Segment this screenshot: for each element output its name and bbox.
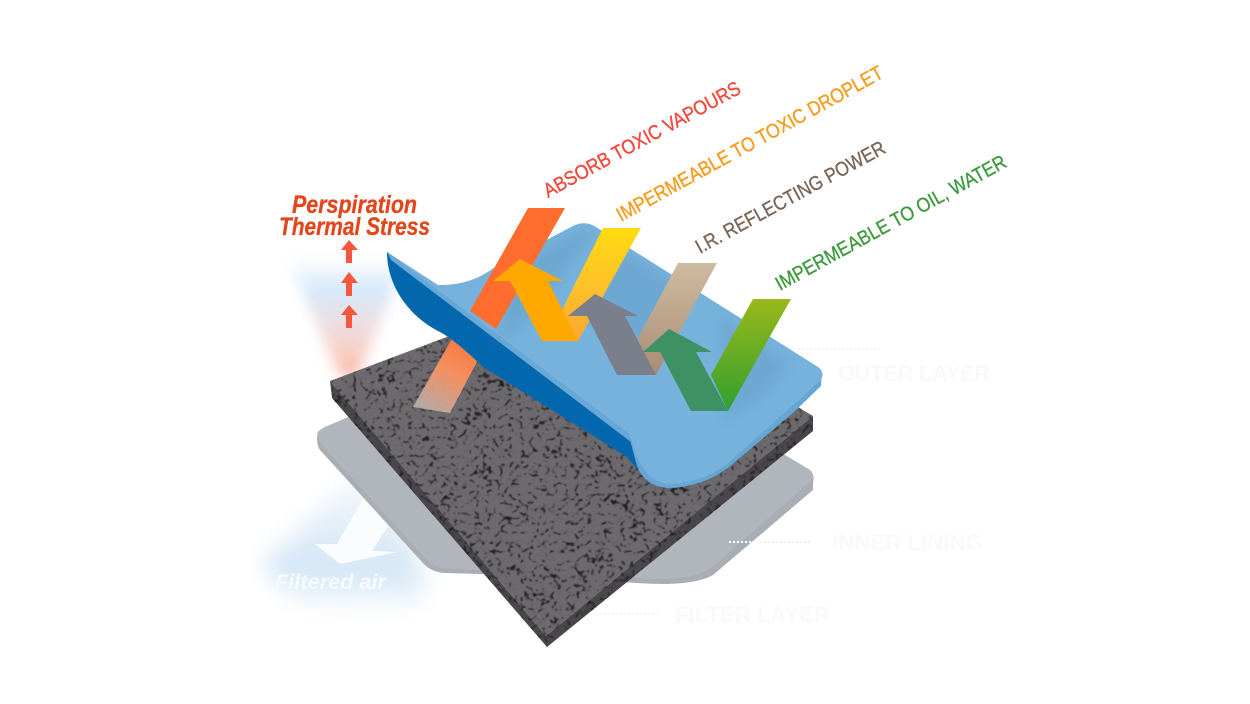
glow: filtered air xyxy=(262,482,428,604)
band: IR incoming xyxy=(637,263,717,375)
band: oil water incoming xyxy=(711,299,791,411)
heading: perspiration thermal stress xyxy=(279,191,430,241)
filter layer edge xyxy=(330,381,813,647)
arrow: IR reflected xyxy=(568,294,656,375)
arrow: droplet reflected xyxy=(493,259,578,341)
heading: perspiration thermal stress: Thermal Stress xyxy=(279,213,430,241)
surface shading xyxy=(498,230,790,420)
band: lower orange transmission xyxy=(413,337,481,413)
band: absorb vapours xyxy=(470,208,565,329)
label: filter layer (faint): FILTER LAYER xyxy=(675,602,830,627)
label: inner lining (faint): INNER LINING xyxy=(832,530,983,555)
leader: filter layer xyxy=(600,613,660,615)
leader: inner lining xyxy=(729,541,812,543)
outer layer rim xyxy=(387,252,631,442)
label: outer layer (faint): OUTER LAYER xyxy=(838,361,990,386)
heading: perspiration thermal stress: Perspiration xyxy=(292,191,417,219)
arrow: filtered air arrow xyxy=(315,499,397,564)
label: filtered air: Filtered air xyxy=(275,571,388,594)
outer layer top surface xyxy=(387,223,823,484)
icon: perspiration arrow 3 xyxy=(341,305,358,328)
icon: perspiration arrow 2 xyxy=(341,272,358,296)
outer layer under-edge xyxy=(630,372,822,488)
filter layer surface xyxy=(330,283,813,636)
outer layer dark side xyxy=(387,252,700,488)
layer: inner lining (grey) xyxy=(317,395,814,584)
label: absorb toxic vapours: ABSORB TOXIC VAPOURS xyxy=(540,78,745,202)
layer: filter layer (dark carbon) xyxy=(330,336,813,647)
leader: outer layer xyxy=(798,348,880,350)
glow: perspiration cone xyxy=(286,255,408,376)
label: IR reflecting power: I.R. REFLECTING POWER xyxy=(692,137,889,258)
icon: perspiration arrow 1 xyxy=(341,240,358,263)
infographic: protective fabric layers xyxy=(259,64,1008,647)
band: droplet incoming xyxy=(562,228,641,341)
label: impermeable to toxic droplet: IMPERMEABLE TO TOXIC DROPLET xyxy=(613,62,887,226)
arrow: oil water repelled xyxy=(643,329,728,411)
label: impermeable to oil water: IMPERMEABLE TO OIL, WATER xyxy=(772,151,1010,295)
layer: outer layer (blue) xyxy=(387,223,823,488)
